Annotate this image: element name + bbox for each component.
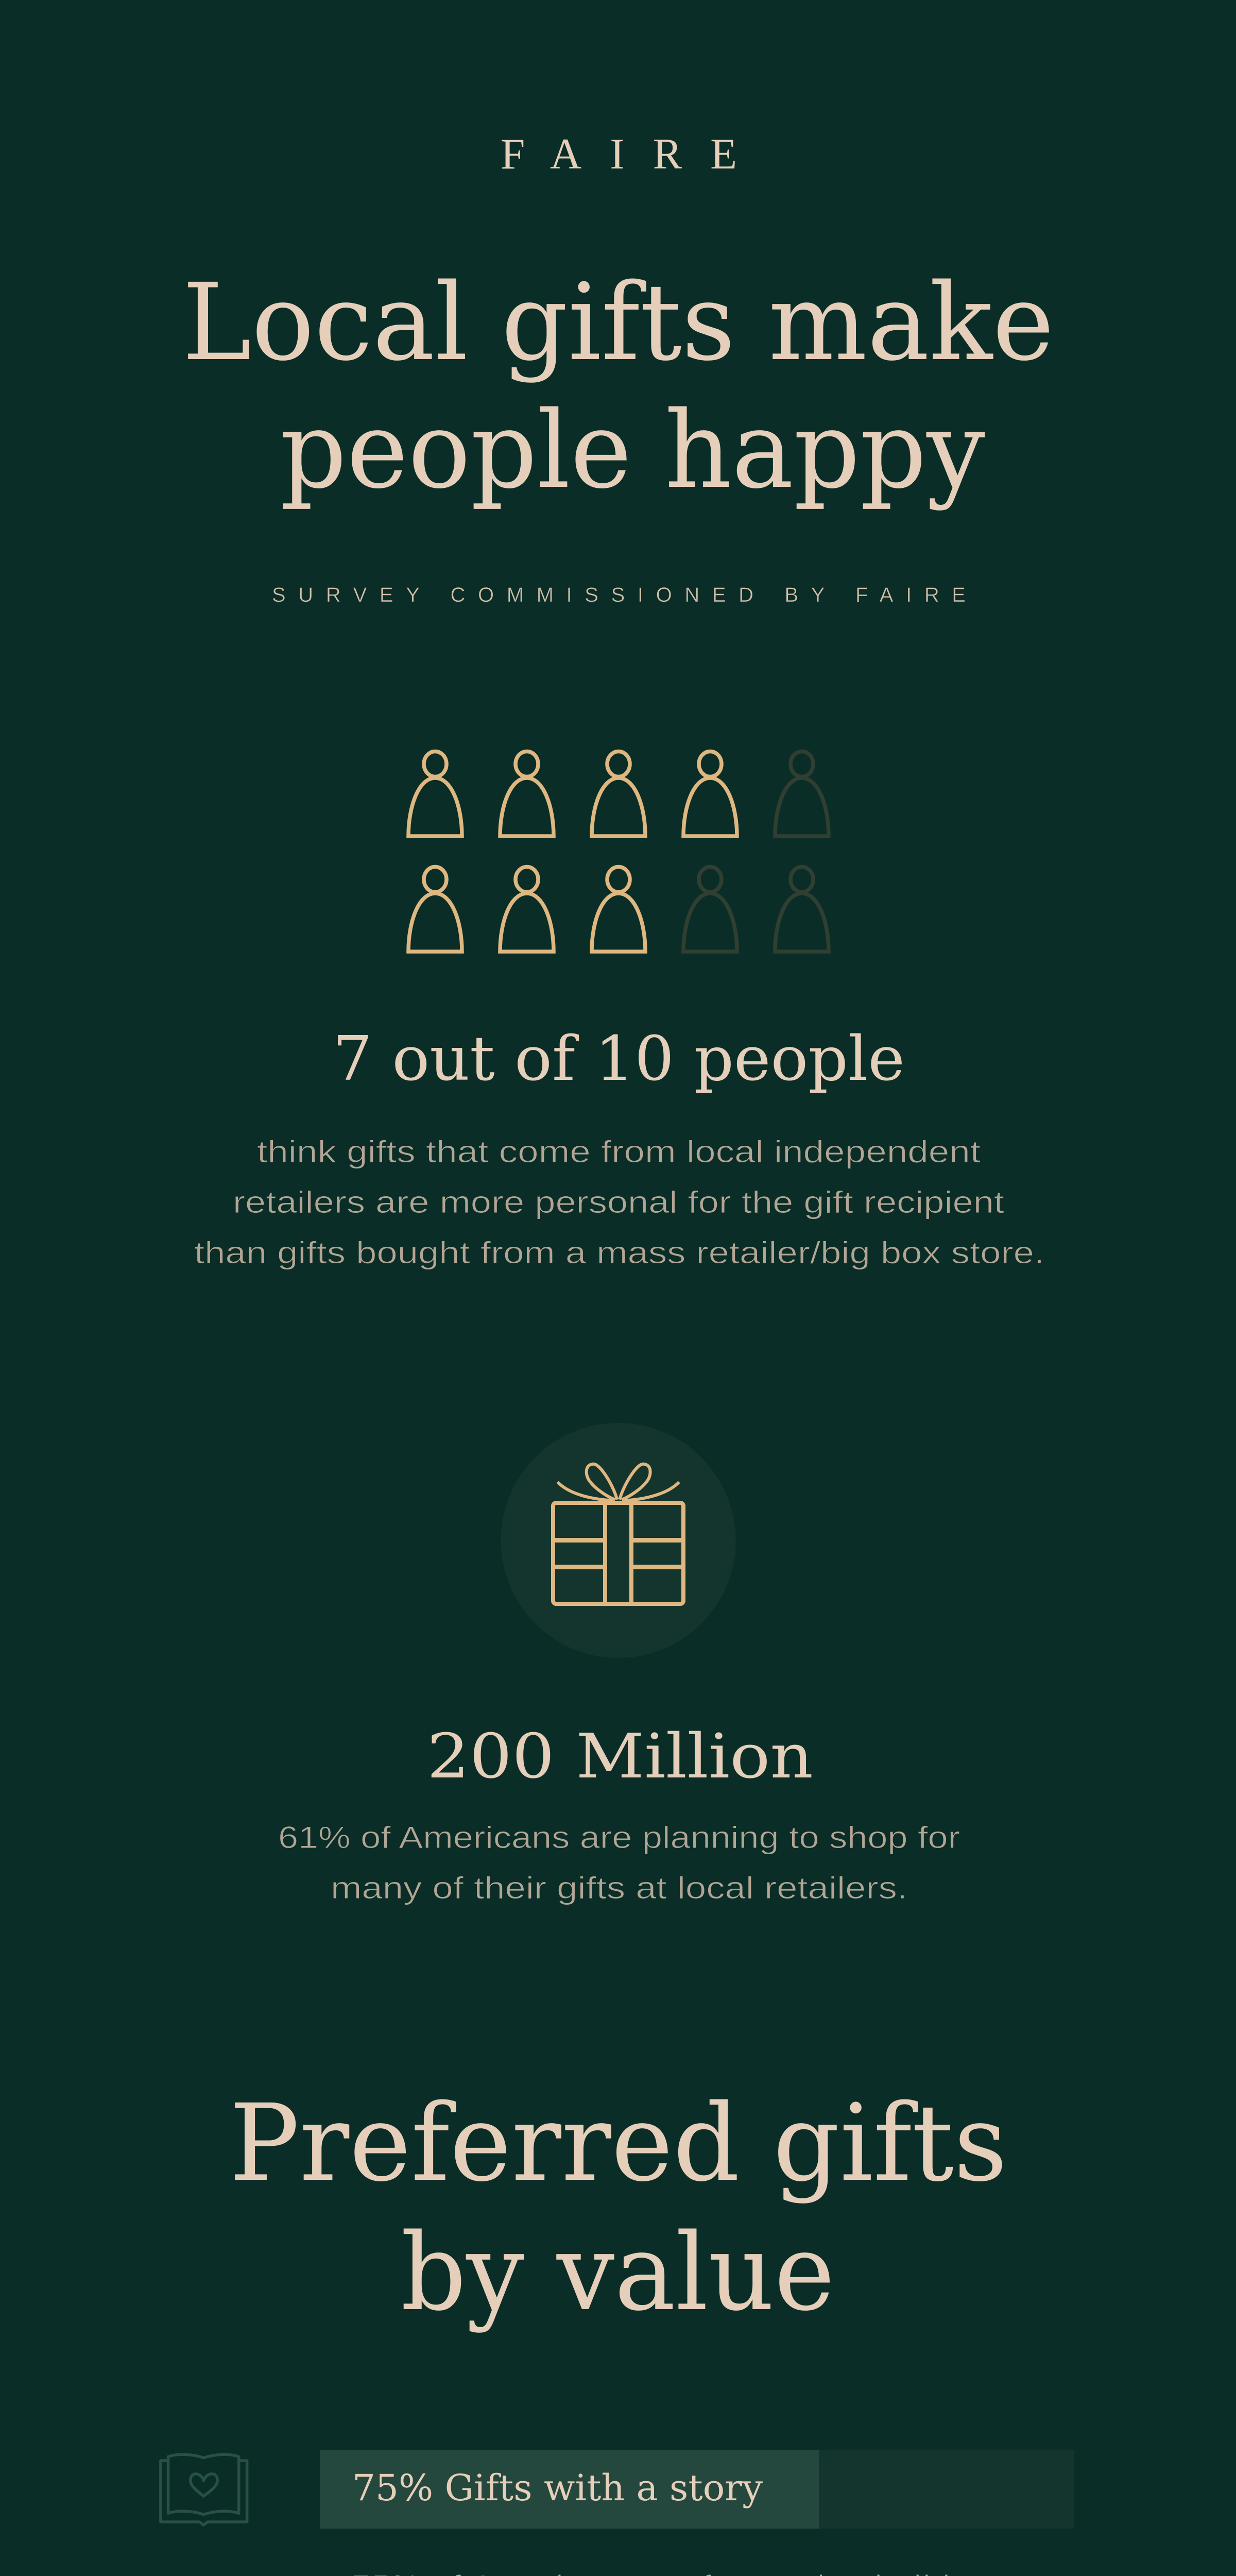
panel: 200 Million: [278, 1423, 960, 1905]
text block: local gifts are more personal: than gifts bought from a mass retailer/big box store.: [194, 1235, 1044, 1270]
heading: 7 out of 10 people: 7 out of 10 people: [333, 1024, 905, 1095]
heading: 200 Million: 200 Million: [427, 1721, 813, 1792]
panel: header: [182, 130, 1054, 606]
text block: 61% of Americans: many of their gifts at local retailers.: [331, 1871, 907, 1905]
text block: 61% of Americans: [278, 1820, 960, 1905]
title: people happy: [280, 388, 985, 512]
text block: local gifts are more personal: think gifts that come from local independent: [257, 1134, 981, 1169]
icon: open book with heart: [161, 2454, 247, 2525]
logo: FAIRE: FAIRE: [501, 130, 737, 178]
title: Local gifts make: [182, 261, 1054, 384]
bar: 75%: 75% Gifts with a story: [352, 2467, 763, 2509]
panel: 7 out of 10 people: [194, 751, 1044, 1270]
icon: ten people pictogram, seven highlighted: [408, 751, 829, 952]
panel: gifts with a story: [161, 2450, 1074, 2576]
heading: Preferred gifts by value: by value: [401, 2211, 835, 2334]
subtitle: SURVEY COMMISSIONED BY FAIRE: [272, 584, 966, 606]
text block: local gifts are more personal: [194, 1134, 1044, 1270]
text block: 61% of Americans: 61% of Americans are planning to shop for: [278, 1820, 960, 1855]
icon: gift in circle: [501, 1423, 735, 1658]
bar: 75%: [320, 2450, 1074, 2529]
heading: Preferred gifts by value: Preferred gifts: [229, 2081, 1007, 2205]
text block: local gifts are more personal: retailers are more personal for the gift recipient: [233, 1185, 1004, 1219]
title: [182, 261, 1054, 512]
heading: Preferred gifts by value: [229, 2081, 1007, 2334]
